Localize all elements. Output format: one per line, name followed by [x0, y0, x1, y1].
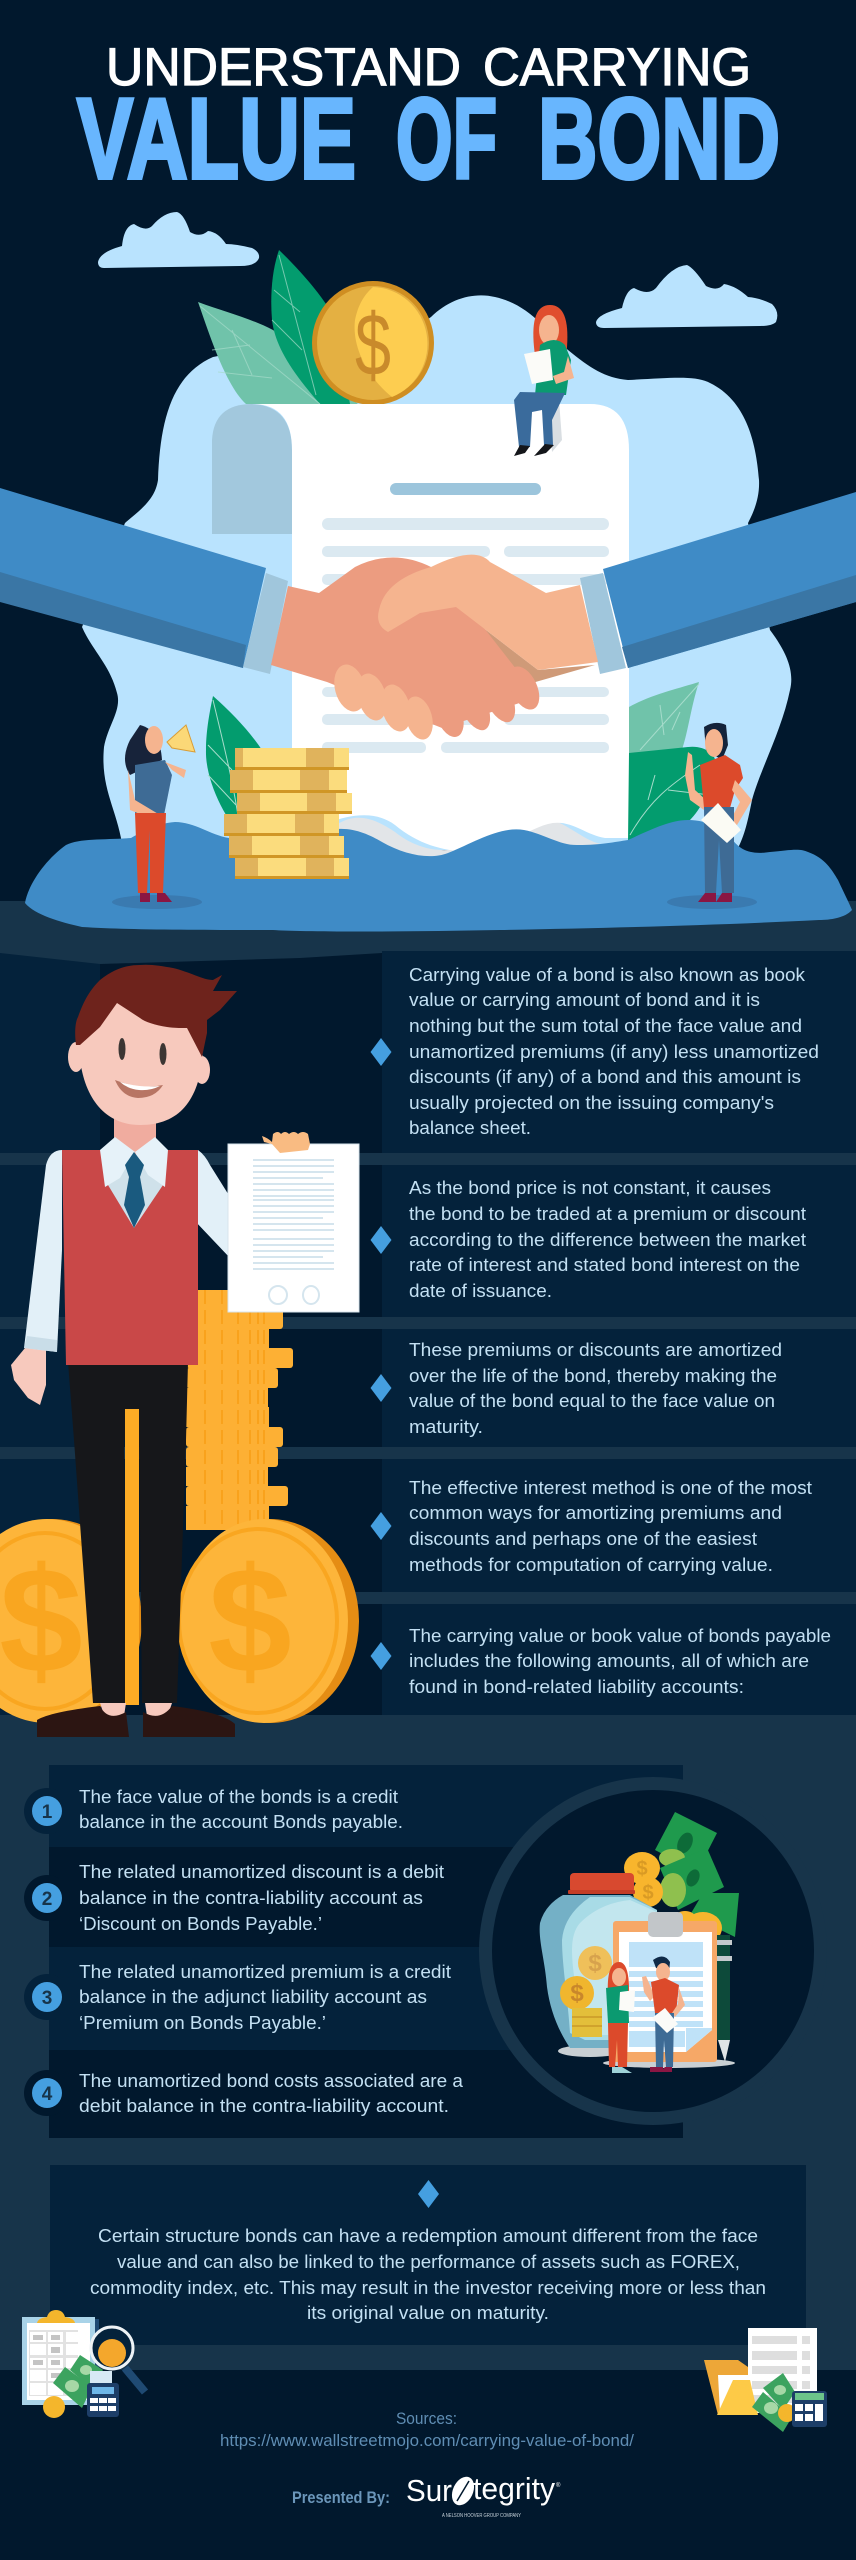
section: explanation rows	[0, 945, 856, 1715]
contract paper	[252, 404, 629, 851]
document	[228, 1132, 359, 1312]
item 4	[24, 2070, 464, 2116]
row 1 text: nothing but the sum total of the face value and	[409, 1016, 802, 1036]
title line 1	[106, 38, 751, 97]
row 2 text: As the bond price is not constant, it causes	[409, 1178, 771, 1198]
large coin right	[179, 1519, 359, 1723]
coin stack	[224, 748, 352, 879]
right sleeve	[580, 492, 856, 674]
large coin left	[0, 1519, 142, 1723]
leaf dark lower left	[206, 696, 273, 840]
title line 2	[77, 76, 780, 203]
item 1: 1	[42, 1802, 53, 1823]
row 3 text: These premiums or discounts are amortized	[409, 1340, 782, 1360]
large coin right: $	[208, 1536, 292, 1704]
list panel	[24, 1765, 683, 2138]
title line 1: UNDERSTAND	[106, 38, 461, 97]
eyes	[118, 1038, 126, 1060]
clipboard shadow	[603, 2058, 735, 2068]
row 2 text: date of issuance.	[409, 1281, 552, 1301]
item 2: ‘Discount on Bonds Payable.’	[79, 1914, 322, 1934]
jar coins: $	[570, 1980, 584, 2007]
item 4: 4	[42, 2084, 53, 2105]
item 2: 2	[42, 1889, 52, 1910]
shoes	[37, 1706, 235, 1737]
row 4 text: The effective interest method is one of the most	[409, 1478, 812, 1498]
row 1 text: usually projected on the issuing company's	[409, 1093, 774, 1113]
jar coins	[560, 1946, 612, 2037]
left sleeve	[0, 488, 288, 674]
row 5 text: found in bond-related liability accounts:	[409, 1677, 744, 1697]
row 4 text: discounts and perhaps one of the easiest	[409, 1529, 757, 1549]
leaf dark lower right	[628, 747, 715, 842]
leaf pale top	[198, 302, 358, 404]
tie	[124, 1152, 145, 1228]
sources: Sources:	[396, 2409, 457, 2428]
lower band background	[0, 1715, 856, 2370]
jar lid	[568, 1873, 635, 1894]
smile	[115, 1080, 163, 1098]
row 5 text: The carrying value or book value of bonds payable	[409, 1626, 831, 1646]
neck	[114, 1100, 156, 1155]
gold coins	[624, 1852, 722, 1944]
panel background	[50, 2165, 806, 2345]
item 3: 3	[42, 1988, 52, 2009]
ground blob	[25, 820, 852, 932]
row 1 text: Carrying value of a bond is also known as book	[409, 965, 806, 985]
coin edge stripes	[205, 1290, 264, 1530]
list rows background	[49, 1765, 683, 2138]
clipboard	[613, 1912, 717, 2062]
jar shadow	[558, 2045, 622, 2057]
closing note panel	[50, 2165, 806, 2345]
item 1	[24, 1787, 403, 1834]
row diamonds	[370, 1038, 392, 1670]
row 2 text: according to the difference between the market	[409, 1230, 806, 1250]
icon: clipboard with magnifier and calculator	[22, 2310, 145, 2418]
leaf pale lower right	[629, 682, 699, 770]
sources	[220, 2409, 634, 2450]
band under hero	[0, 901, 856, 953]
row 5 text	[409, 1626, 831, 1697]
row 1 text: balance sheet.	[409, 1118, 531, 1138]
logo: A NELSON HOOVER GROUP COMPANY	[442, 2513, 522, 2519]
note text: commodity index, etc. This may result in the investor receiving more or less than	[90, 2278, 766, 2298]
circle ring	[479, 1777, 827, 2125]
gold coins: $	[636, 1858, 648, 1880]
jar coins: $	[588, 1950, 602, 1977]
hair	[75, 965, 237, 1057]
row 2 text	[409, 1178, 806, 1301]
note text: Certain structure bonds can have a redemption amount different from the face	[98, 2226, 758, 2246]
gold coin: $	[355, 295, 391, 394]
item 3: The related unamortized premium is a credit	[79, 1962, 451, 1982]
item 3	[24, 1962, 451, 2033]
leaf dark top	[271, 250, 350, 404]
logo	[406, 2471, 561, 2519]
row 1 text	[409, 965, 819, 1138]
row 2 text: rate of interest and stated bond interest on the	[409, 1255, 800, 1275]
gold coin	[312, 281, 434, 405]
banknotes	[655, 1812, 739, 1937]
row 4 text	[409, 1478, 812, 1575]
row 3 text: value of the bond equal to the face value on	[409, 1391, 775, 1411]
row 1 text: discounts (if any) of a bond and this amount is	[409, 1067, 801, 1087]
note text: value and can also be linked to the performance of assets such as FOREX,	[117, 2252, 740, 2272]
hero illustration	[0, 212, 856, 932]
presented by: Presented By:	[292, 2488, 390, 2507]
collar	[100, 1137, 168, 1187]
row 5 text: includes the following amounts, all of which are	[409, 1651, 809, 1671]
shirt front	[105, 1150, 165, 1228]
cloud right	[596, 265, 777, 328]
large coin left: $	[0, 1536, 83, 1704]
row 4 text: common ways for amortizing premiums and	[409, 1503, 782, 1523]
cloud left	[98, 212, 259, 268]
circle inner	[492, 1790, 814, 2112]
right sleeve	[194, 1150, 230, 1258]
pen	[717, 1935, 732, 2062]
background blob	[82, 295, 791, 850]
pants	[68, 1362, 188, 1703]
row 4 text: methods for computation of carrying value.	[409, 1555, 773, 1575]
left hand	[11, 1348, 46, 1405]
item 3: ‘Premium on Bonds Payable.’	[79, 2013, 326, 2033]
item 4: The unamortized bond costs associated are a	[79, 2071, 464, 2091]
icon: folder, sheet, money and calculator	[704, 2328, 827, 2432]
logo: Sur	[406, 2473, 452, 2508]
title line 1: CARRYING	[483, 38, 751, 97]
businessman	[11, 965, 359, 1737]
woman with megaphone	[112, 725, 202, 909]
row 3 text: over the life of the bond, thereby making the	[409, 1366, 777, 1386]
item 3: balance in the adjunct liability account as	[79, 1987, 427, 2007]
contract shadow edge	[292, 800, 629, 880]
orange gap between legs	[125, 1409, 139, 1705]
logo: ®	[556, 2482, 561, 2489]
contract roll	[212, 404, 292, 534]
row 3 text: maturity.	[409, 1417, 483, 1437]
coin pile	[186, 1290, 293, 1530]
item 2	[24, 1862, 444, 1934]
title line 2: OF	[396, 76, 497, 203]
man with paper	[667, 723, 757, 909]
sources: https://www.wallstreetmojo.com/carrying-value-of-bond/	[220, 2431, 634, 2450]
diamond	[418, 2180, 439, 2208]
logo: tegrity	[473, 2471, 555, 2506]
item 1: The face value of the bonds is a credit	[79, 1787, 398, 1807]
row 2 text: the bond to be traded at a premium or discount	[409, 1204, 806, 1224]
row 3 text	[409, 1340, 782, 1437]
title	[77, 38, 780, 203]
row 1 text: unamortized premiums (if any) less unamortized	[409, 1042, 819, 1062]
item 4: debit balance in the contra-liability account.	[79, 2096, 449, 2116]
leaf veins	[200, 255, 320, 404]
item 2: The related unamortized discount is a debit	[79, 1862, 444, 1882]
round illustration: jar and clipboard	[479, 1777, 827, 2125]
gold coins: $	[642, 1882, 654, 1904]
ears	[68, 1042, 84, 1072]
title line 2: VALUE	[77, 76, 356, 203]
left sleeve	[24, 1150, 62, 1352]
note text: its original value on maturity.	[307, 2303, 549, 2323]
jar body	[540, 1895, 660, 2048]
two people	[606, 1956, 685, 2073]
seated woman	[514, 305, 574, 456]
face	[79, 1000, 203, 1125]
handshake	[271, 555, 598, 743]
vest	[62, 1150, 198, 1365]
note text	[90, 2226, 766, 2323]
socks	[100, 1703, 172, 1719]
row backgrounds	[0, 945, 856, 1715]
contract lines	[322, 483, 609, 753]
row 1 text: value or carrying amount of bond and it is	[409, 990, 760, 1010]
item 1: balance in the account Bonds payable.	[79, 1812, 403, 1832]
item 2: balance in the contra-liability account as	[79, 1888, 423, 1908]
